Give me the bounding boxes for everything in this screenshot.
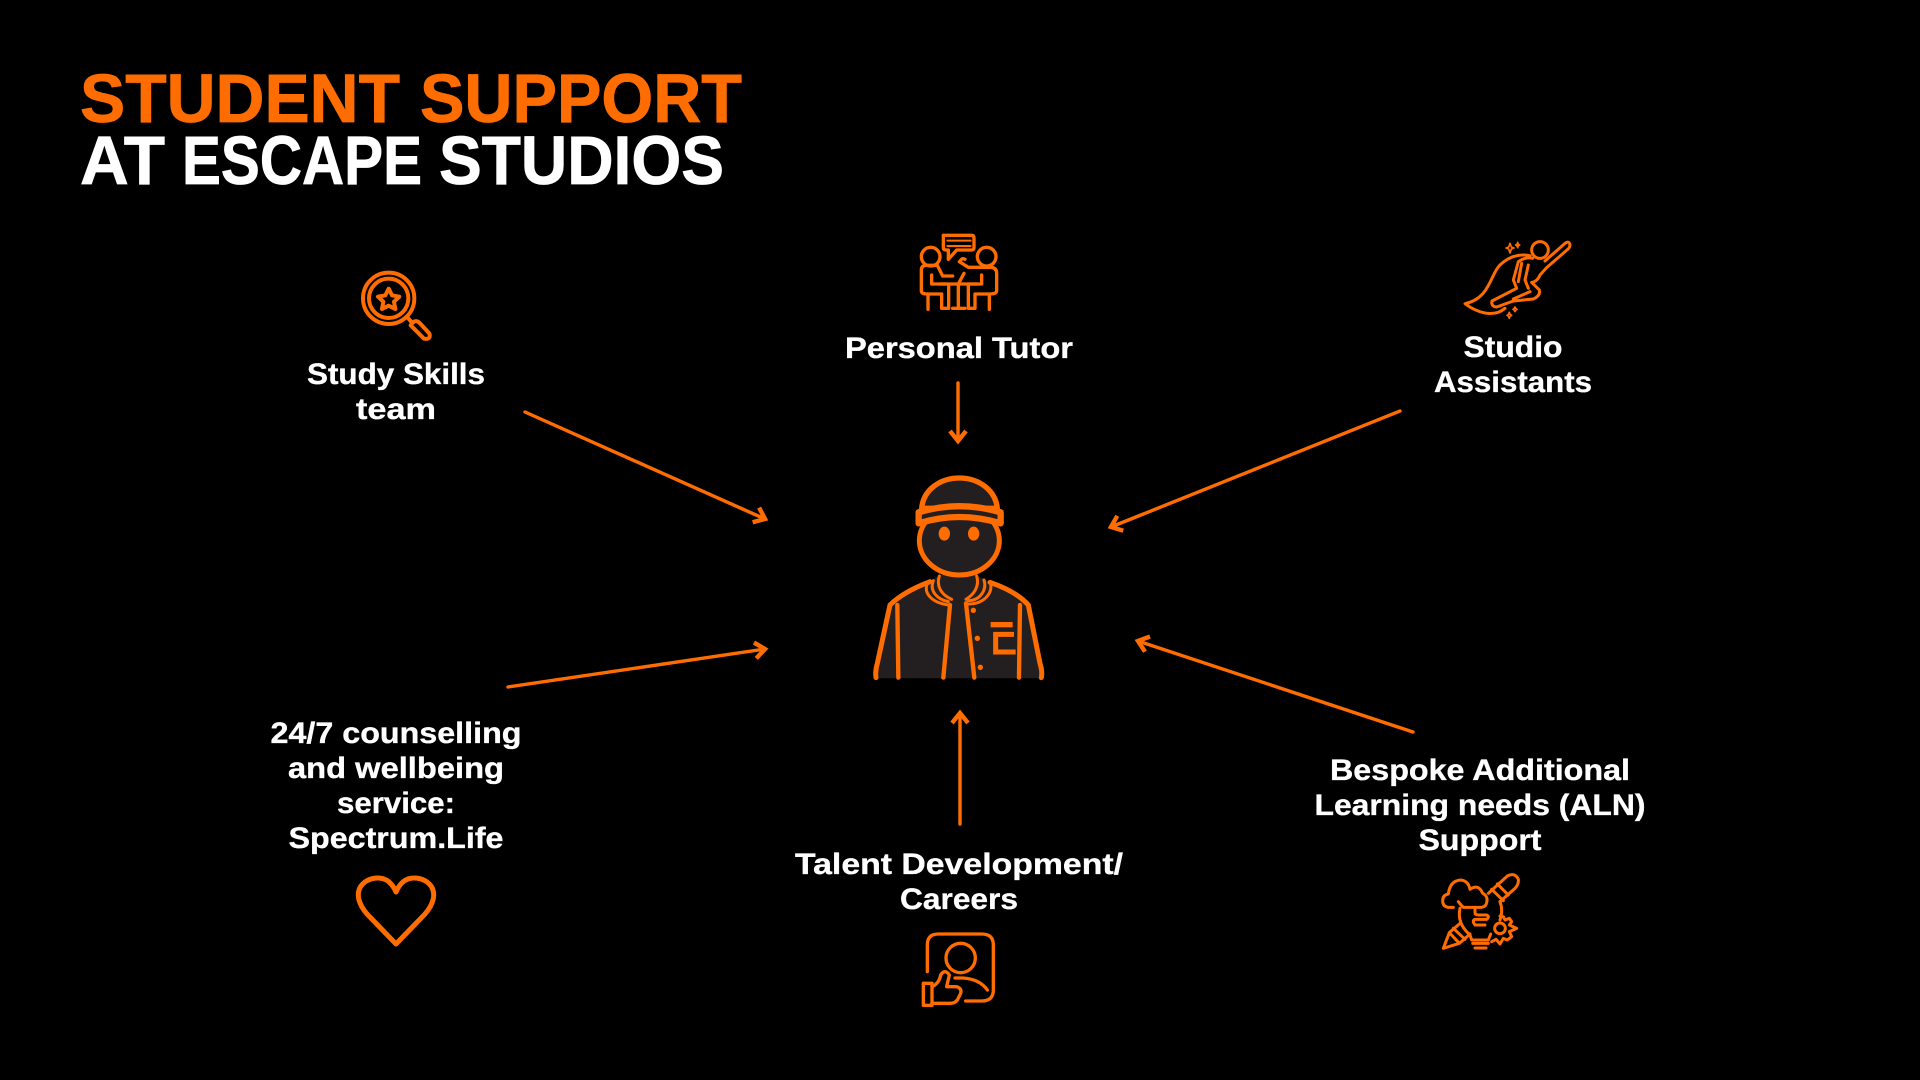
label: talent development: Talent Development/ [795,848,1124,881]
label: counselling [270,717,522,855]
label: studio assistants: Studio [1464,331,1562,364]
arrow: ALN support to student [1138,641,1413,732]
label: personal tutor: Personal Tutor [845,332,1073,365]
arrow: counselling to student [508,649,765,687]
title [80,60,742,199]
label: talent development [795,848,1124,916]
label: studio assistants [1434,331,1592,399]
label: study skills: Study Skills [307,358,485,391]
label: counselling: 24/7 counselling [270,717,522,750]
icon: profile with thumbs up [923,934,993,1005]
icon: tutor meeting [921,235,997,309]
icon: superhero studio assistant [1465,242,1570,318]
label: ALN support: Bespoke Additional [1330,754,1630,787]
title: ESCAPE [182,122,422,199]
icon: student [876,478,1042,678]
label: ALN support: Learning needs (ALN) [1314,789,1646,822]
title: STUDENT [80,60,400,137]
arrow: personal tutor to student [956,383,960,441]
icon: magnifying glass with star [363,273,430,339]
label: talent development: Careers [900,883,1018,916]
label: study skills: team [356,393,436,426]
arrow: studio assistants to student [1111,411,1400,527]
label: ALN support: Support [1418,824,1542,857]
arrow: talent development to student [958,713,962,824]
title: AT [80,122,165,199]
icon: heart [358,878,434,944]
title: SUPPORT [420,60,742,137]
label: ALN support [1314,754,1646,857]
label: study skills [307,358,485,426]
label: studio assistants: Assistants [1434,366,1592,399]
label: counselling: service: [337,787,455,820]
arrow: study skills to student [525,412,765,519]
title: STUDIOS [439,122,724,199]
icon: brain bulb, pencil and gear [1443,875,1518,948]
label: counselling: and wellbeing [288,752,504,785]
label: counselling: Spectrum.Life [288,822,504,855]
